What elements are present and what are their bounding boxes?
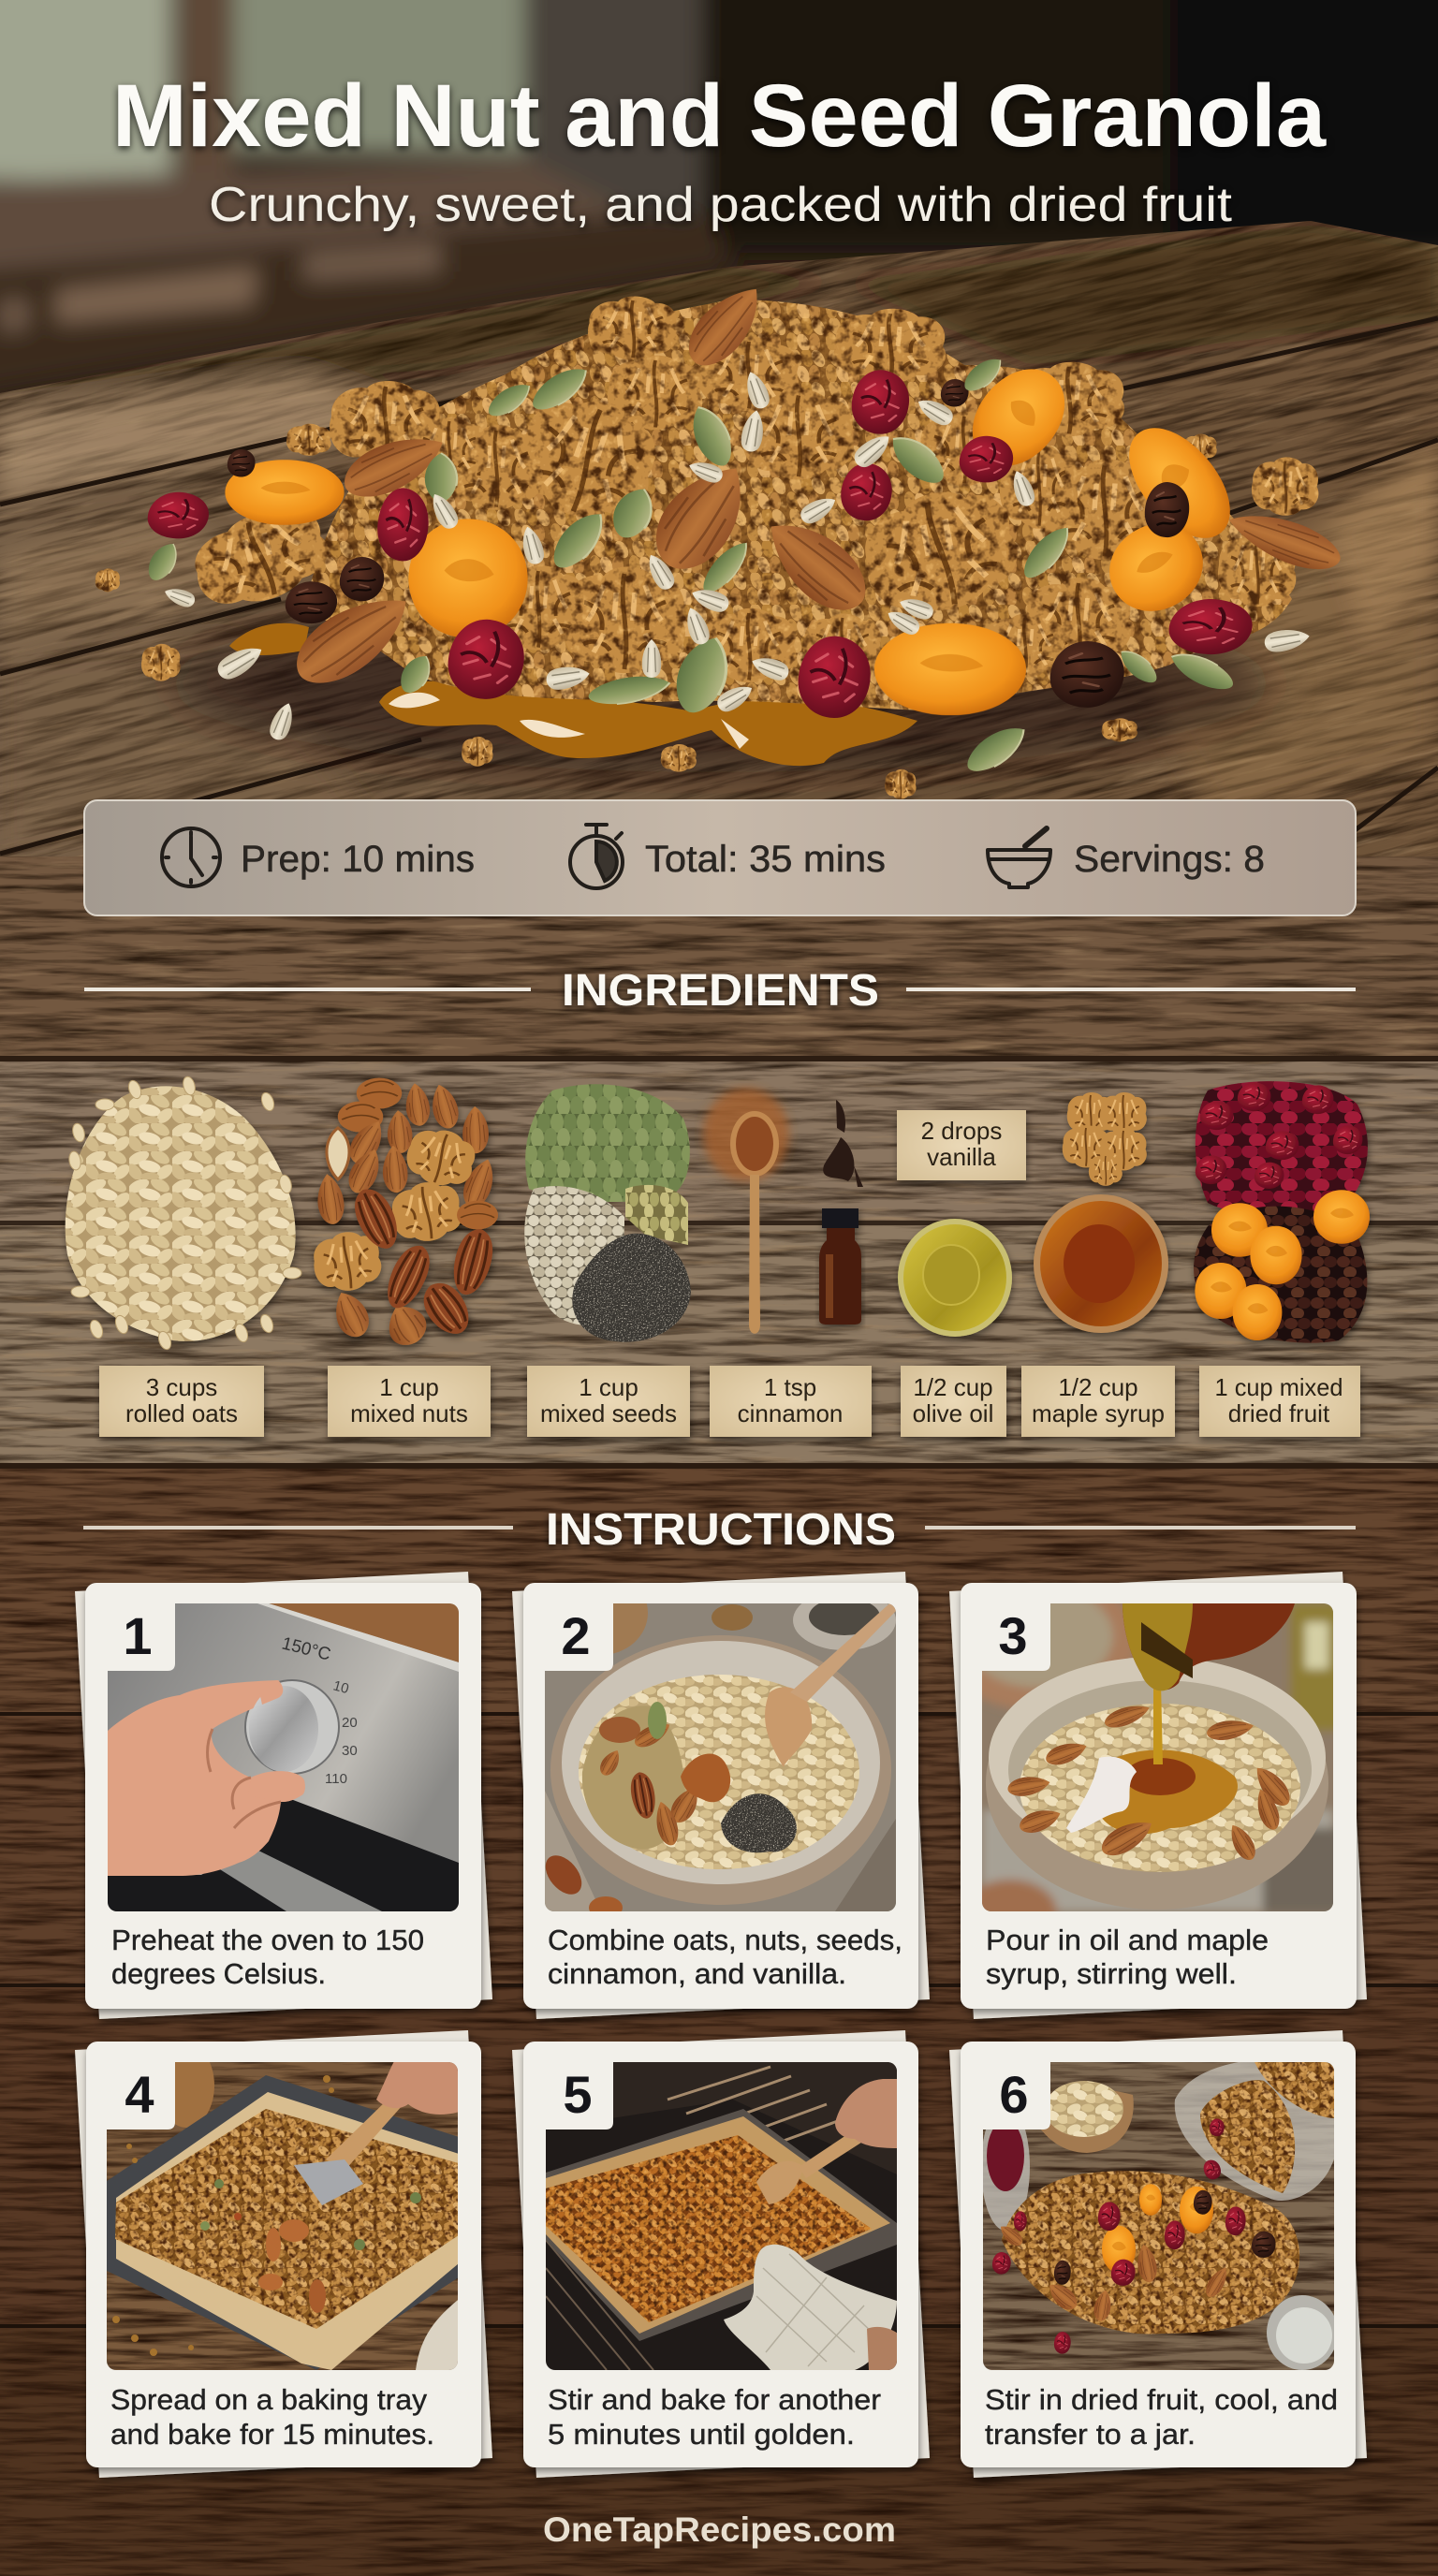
table: [0, 221, 1438, 856]
step 6 caption: transfer to a jar.: [985, 2418, 1196, 2451]
cranberries and raisins: [148, 370, 1253, 718]
servings: Servings: 8: [1074, 839, 1265, 880]
label: mixed nuts: 1 cup: [379, 1373, 439, 1401]
step 3 caption: [986, 1924, 1269, 1990]
prep time: Prep: 10 mins: [241, 839, 475, 880]
step 1 caption: Preheat the oven to 150: [111, 1924, 424, 1956]
vanilla pods: [823, 1100, 863, 1187]
label: cinnamon: cinnamon: [738, 1399, 843, 1427]
step 2 photo: mixing bowl: [545, 1603, 896, 1911]
walnuts: [1063, 1092, 1147, 1186]
almonds: [283, 274, 1347, 699]
step 1 photo: oven dial: 20: [342, 1715, 358, 1731]
maple syrup pool: [229, 623, 917, 766]
step 2 caption: cinnamon, and vanilla.: [548, 1957, 846, 1990]
step 6 card: [949, 2030, 1367, 2478]
step 1 caption: degrees Celsius.: [111, 1957, 326, 1990]
step 5 card: [512, 2030, 930, 2478]
icon: mortar bowl: [988, 828, 1050, 887]
title: Mixed Nut and Seed Granola: [112, 66, 1327, 166]
label: mixed seeds: 1 cup: [579, 1373, 638, 1401]
label: mixed nuts: mixed nuts: [350, 1399, 468, 1427]
label: rolled oats: rolled oats: [125, 1399, 238, 1427]
label: maple syrup: [1021, 1366, 1175, 1437]
vanilla bottle: [819, 1208, 861, 1325]
label: rolled oats: [99, 1366, 264, 1437]
step 6 caption: [985, 2383, 1338, 2451]
label: cinnamon: [710, 1366, 872, 1437]
step 1 photo: oven dial: 150°C: [280, 1633, 332, 1665]
step 6 caption: Stir in dried fruit, cool, and: [985, 2383, 1338, 2416]
instructions heading: [83, 1505, 1356, 1555]
icon: stopwatch: [570, 825, 623, 888]
label: dried fruit: 1 cup mixed: [1215, 1373, 1343, 1401]
label: dried fruit: dried fruit: [1228, 1399, 1330, 1427]
rolled oats pile: [66, 1076, 301, 1351]
step 1 photo: oven dial: 30: [342, 1743, 358, 1759]
icon: clock: [162, 828, 220, 886]
step 5 photo: tray in oven: [546, 2062, 898, 2370]
window background: [0, 0, 1438, 431]
vanilla label: [897, 1110, 1026, 1180]
footer website: OneTapRecipes.com: [543, 2510, 896, 2549]
step 2 caption: Combine oats, nuts, seeds,: [548, 1924, 902, 1956]
total time: Total: 35 mins: [645, 839, 886, 880]
step 4 card: [75, 2030, 492, 2478]
label: olive oil: olive oil: [913, 1399, 993, 1427]
pile shadow: [169, 594, 1273, 772]
apricots: [225, 351, 1249, 715]
ingredients panel: [66, 1076, 1370, 1437]
label: mixed seeds: [527, 1366, 690, 1437]
number tab 5: 5: [563, 2065, 593, 2124]
label: mixed seeds: mixed seeds: [540, 1399, 677, 1427]
stats pill: [84, 800, 1356, 915]
step 1 photo: oven dial: 110: [325, 1771, 347, 1787]
number tab 5: [546, 2062, 613, 2130]
label: olive oil: [901, 1366, 1006, 1437]
step 3 photo: pouring syrup: [982, 1603, 1333, 1911]
label: olive oil: 1/2 cup: [913, 1373, 993, 1401]
number tab 2: [545, 1603, 613, 1671]
step 1 caption: [111, 1924, 424, 1990]
label: rolled oats: 3 cups: [146, 1373, 217, 1401]
step 3 caption: syrup, stirring well.: [986, 1957, 1237, 1990]
step 4 caption: and bake for 15 minutes.: [110, 2418, 434, 2451]
number tab 2: 2: [561, 1606, 591, 1665]
number tab 6: [983, 2062, 1050, 2130]
step 2 caption: [548, 1924, 902, 1990]
step 5 caption: Stir and bake for another: [548, 2383, 881, 2416]
step 5 caption: [548, 2383, 881, 2451]
hero photo: granola on rustic table: [0, 0, 1438, 856]
step 1 card: [75, 1572, 492, 2019]
instructions heading: INSTRUCTIONS: [546, 1505, 896, 1555]
number tab 4: [107, 2062, 175, 2130]
ingredients heading: INGREDIENTS: [562, 966, 879, 1016]
granola pile: [95, 297, 1318, 799]
ingredients heading: [84, 966, 1356, 1016]
vanilla label: 2 drops: [921, 1117, 1002, 1145]
step 1 photo: oven dial: [108, 1603, 459, 1911]
pumpkin seeds: [142, 352, 1238, 780]
step 3 card: [940, 1571, 1367, 2019]
label: dried fruit: [1199, 1366, 1360, 1437]
step 1 photo: oven dial: 10: [331, 1677, 350, 1697]
number tab 6: 6: [999, 2065, 1029, 2124]
step 2 card: [512, 1571, 930, 2019]
dried fruit pile: [1194, 1081, 1370, 1343]
number tab 4: 4: [125, 2065, 154, 2124]
number tab 1: 1: [123, 1606, 153, 1665]
olive oil bowl: [898, 1219, 1012, 1337]
step 6 photo: jar and granola: [981, 2058, 1338, 2370]
mixed seeds pile: [524, 1084, 691, 1342]
label: maple syrup: 1/2 cup: [1058, 1373, 1138, 1401]
ingredient labels: [99, 1366, 1360, 1437]
number tab 1: [108, 1603, 175, 1671]
vanilla label: vanilla: [927, 1143, 996, 1171]
step 4 photo: spreading on tray: [107, 2043, 462, 2370]
label: maple syrup: maple syrup: [1032, 1399, 1165, 1427]
cinnamon and spoon: [703, 1088, 789, 1334]
label: mixed nuts: [328, 1366, 491, 1437]
number tab 3: [982, 1603, 1050, 1671]
step 4 caption: Spread on a baking tray: [110, 2383, 428, 2416]
step 4 caption: [110, 2383, 434, 2451]
label: cinnamon: 1 tsp: [764, 1373, 816, 1401]
maple syrup bowl: [1034, 1194, 1168, 1333]
subtitle: Crunchy, sweet, and packed with dried fruit: [209, 178, 1233, 232]
step 3 caption: Pour in oil and maple: [986, 1924, 1269, 1956]
page background: wood: [0, 842, 1438, 2576]
number tab 3: 3: [998, 1606, 1028, 1665]
mixed nuts pile: [310, 1078, 500, 1352]
sunflower seeds: [162, 369, 1312, 742]
step 5 caption: 5 minutes until golden.: [548, 2418, 855, 2451]
